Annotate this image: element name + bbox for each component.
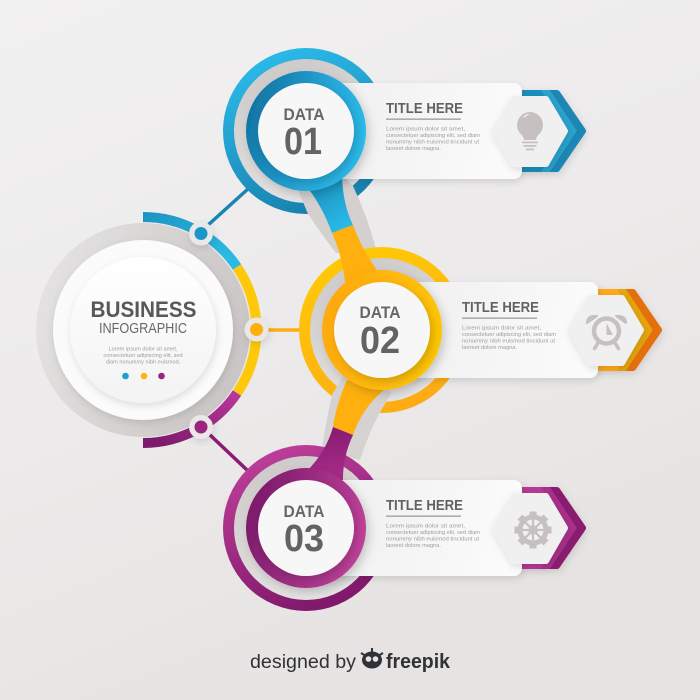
grey connector band: bottom xyxy=(322,370,392,460)
node: blue xyxy=(189,222,213,246)
hub description: diam nonummy nibh euismod. xyxy=(106,360,181,366)
hub colored arc: purple xyxy=(143,393,237,443)
panel 2 text: Lorem ipsum dolor sit amet, xyxy=(462,326,542,332)
connector: blue to yellow ribbon xyxy=(304,176,379,282)
module 3 badge: 03 xyxy=(284,518,324,560)
hub description: consectetuer adipiscing elit, sed xyxy=(103,353,183,359)
connector lines from hub to modules xyxy=(207,188,324,488)
panel 1 text: laoreet dolore magna. xyxy=(386,146,441,152)
credit: designed by freepik: designed by xyxy=(250,652,357,673)
hub description: Lorem ipsum dolor sit amet, xyxy=(108,346,178,352)
panel 1 card xyxy=(310,83,522,179)
panel 3 text: laoreet dolore magna. xyxy=(386,543,441,549)
panel 2 text: TITLE HERE xyxy=(462,299,539,316)
panel 1 text xyxy=(386,100,480,152)
hexagon 2 xyxy=(571,298,641,363)
module 3 badge xyxy=(246,468,366,588)
panel 2 text: consectetuer adipiscing elit, sed diam xyxy=(462,332,556,338)
module 1 badge: DATA xyxy=(284,106,325,124)
credit: designed by freepik: freepik xyxy=(386,651,451,673)
hub colored arc: blue xyxy=(143,217,237,267)
credit: designed by freepik xyxy=(250,648,451,673)
panel 2: arrow tag xyxy=(594,289,659,371)
panel 2 text: nonummy nibh euismod tincidunt ut xyxy=(462,338,555,344)
icon: freepik mascot xyxy=(361,648,383,668)
hub grey ring xyxy=(36,223,250,437)
panel 2 text xyxy=(462,299,556,351)
panel 3 text: TITLE HERE xyxy=(386,497,463,514)
panel 1 text: nonummy nibh euismod tincidunt ut xyxy=(386,140,479,146)
panel 3 text: nonummy nibh euismod tincidunt ut xyxy=(386,536,479,542)
icon: light bulb xyxy=(517,112,543,150)
module 2 badge: DATA xyxy=(360,304,401,322)
hub inner disc xyxy=(70,257,216,403)
module 2 badge: 02 xyxy=(360,320,400,362)
icon: alarm clock xyxy=(587,316,626,348)
connector: yellow to purple ribbon xyxy=(306,380,385,484)
grey connector band: top xyxy=(298,178,376,253)
panel 1 text: Lorem ipsum dolor sit amet, xyxy=(386,126,466,132)
hexagon 1 xyxy=(495,99,565,164)
panel 1 text: consectetuer adipiscing elit, sed diam xyxy=(386,133,480,139)
node: purple xyxy=(189,415,213,439)
hexagon 3 xyxy=(495,496,565,561)
hub description xyxy=(103,346,183,366)
panel 3 text: Lorem ipsum dolor sit amet, xyxy=(386,524,466,530)
node: yellow xyxy=(244,318,268,342)
module 1 badge: 01 xyxy=(284,121,322,163)
hub outer disc xyxy=(53,240,233,420)
hub colored arc: yellow xyxy=(237,267,256,393)
icon: gear wheel xyxy=(514,512,552,548)
panel 2 card xyxy=(386,282,598,378)
panel 3 card xyxy=(310,480,522,576)
module 1 badge xyxy=(246,71,366,191)
hub color dots xyxy=(122,373,165,379)
central hub: business infographic xyxy=(36,217,256,443)
panel 2 text: laoreet dolore magna. xyxy=(462,345,517,351)
module 1 outer ring xyxy=(223,48,389,214)
panel 1: arrow tag xyxy=(518,90,583,172)
module 3 outer ring xyxy=(223,445,389,611)
panel 3 text xyxy=(386,497,480,549)
module 2 badge xyxy=(322,270,442,390)
panel 1 text: TITLE HERE xyxy=(386,100,463,117)
hub title: BUSINESS xyxy=(90,297,196,322)
panel 3: arrow tag xyxy=(518,487,583,569)
module 3 badge: DATA xyxy=(284,503,325,521)
panel 3 text: consectetuer adipiscing elit, sed diam xyxy=(386,530,480,536)
module 2 outer ring xyxy=(299,247,465,413)
hub subtitle: INFOGRAPHIC xyxy=(99,321,187,337)
